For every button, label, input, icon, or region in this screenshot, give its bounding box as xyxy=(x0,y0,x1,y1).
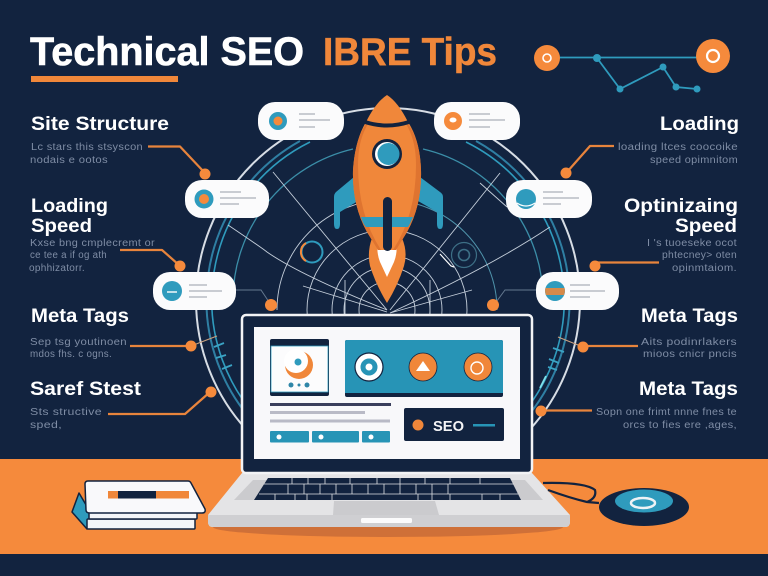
panel: left meta tags text: Sep tsg youtinoen xyxy=(30,337,127,348)
pill: top right xyxy=(434,102,520,140)
panel: left loading speed text: ce tee a if og ath xyxy=(30,250,107,261)
panel: right loading text xyxy=(618,114,739,166)
screen icon panel xyxy=(345,340,503,397)
panel: left saref stest text: Saref Stest xyxy=(30,379,142,400)
panel: right meta tags text xyxy=(641,306,738,360)
panel: left loading speed text: Loading xyxy=(31,196,108,217)
laptop shadow xyxy=(213,517,563,537)
icon: network graph xyxy=(534,39,730,92)
panel: left loading speed text: ophhizatorr. xyxy=(29,263,85,274)
title underline xyxy=(31,76,178,82)
panel: left saref stest text: sped, xyxy=(30,420,62,431)
panel: left loading speed text: Kxse bng cmplecremt or xyxy=(30,238,155,249)
title xyxy=(30,30,497,74)
laptop xyxy=(208,315,570,537)
node dots above laptop xyxy=(265,299,499,311)
panel: left site structure text: Lc stars this stsyscon xyxy=(31,142,143,153)
icon: ring right xyxy=(452,242,476,268)
rocket xyxy=(334,95,443,303)
pill: middle right xyxy=(506,180,592,218)
title: Technical SEO xyxy=(30,30,304,74)
SEO badge xyxy=(404,408,504,441)
radar background xyxy=(191,108,583,492)
pill: lower left xyxy=(153,272,236,310)
rocket body xyxy=(353,95,421,250)
rocket flame xyxy=(369,238,406,303)
panel: left meta tags text xyxy=(30,306,129,360)
connector: right meta tags xyxy=(578,342,638,352)
connector: site structure xyxy=(148,146,210,180)
panel: right meta tags text lower: Meta Tags xyxy=(639,379,738,400)
connector: right loading xyxy=(560,146,614,178)
panel: right optimizing speed text: Optinizaing xyxy=(624,196,738,217)
panel: right meta tags text: Meta Tags xyxy=(641,306,738,327)
SEO badge: SEO xyxy=(433,418,464,435)
pill: top left xyxy=(258,102,344,140)
connector: right optimizing xyxy=(590,260,659,272)
connector: right meta tags lower xyxy=(536,406,592,416)
mouse and cable xyxy=(543,483,689,526)
screen text lines xyxy=(270,403,391,422)
panel: left saref stest text xyxy=(30,379,142,431)
panel: right optimizing speed text: phtecney> oten xyxy=(662,250,737,261)
title: IBRE Tips xyxy=(323,31,497,74)
screen buttons xyxy=(270,431,390,442)
panel: right loading text: loading ltces coocoike xyxy=(618,142,738,153)
panel: left site structure text: nodais e ootos xyxy=(30,155,108,166)
panel: right loading text: speed opimnitom xyxy=(650,155,738,166)
panel: right meta tags text: Aits podinrlakers xyxy=(641,337,737,348)
panel: right optimizing speed text: I 's tuoeseke ocot xyxy=(647,238,737,249)
connector: loading speed xyxy=(120,250,186,272)
rocket fins xyxy=(334,177,443,229)
laptop lid xyxy=(242,315,532,473)
panel: right optimizing speed text: Speed xyxy=(675,216,737,237)
panel: left loading speed text: Speed xyxy=(31,216,92,237)
panel: right loading text: Loading xyxy=(660,114,739,135)
screen thumbnail xyxy=(270,339,329,396)
panel: left meta tags text: mdos fhs. c ogns. xyxy=(30,349,112,360)
panel: right meta tags text lower: orcs to fies ere ,ages, xyxy=(623,420,737,431)
panel: left loading speed text xyxy=(29,196,155,274)
panel: right meta tags text lower xyxy=(596,379,738,431)
books xyxy=(72,481,205,529)
panel: right meta tags text: mioos cnicr pncis xyxy=(643,349,737,360)
connector: meta tags xyxy=(130,340,196,352)
icon: ring left xyxy=(301,242,322,262)
panel: left site structure text xyxy=(30,114,169,166)
panel: left site structure text: Site Structure xyxy=(31,114,169,135)
trackpad xyxy=(333,501,439,515)
panel: right optimizing speed text: opinmtaiom. xyxy=(672,263,737,274)
rocket window xyxy=(372,139,402,169)
panel: right meta tags text lower: Sopn one frimt nnne fnes te xyxy=(596,407,737,418)
pill: lower right xyxy=(536,272,619,310)
connector: saref stest xyxy=(108,386,216,414)
pill: middle left xyxy=(185,180,269,218)
laptop base xyxy=(208,473,570,527)
keyboard xyxy=(254,478,521,500)
panel: left meta tags text: Meta Tags xyxy=(31,306,129,327)
panel: left saref stest text: Sts structive xyxy=(30,407,102,418)
panel: right optimizing speed text xyxy=(624,196,738,274)
orange desk band xyxy=(0,459,768,554)
